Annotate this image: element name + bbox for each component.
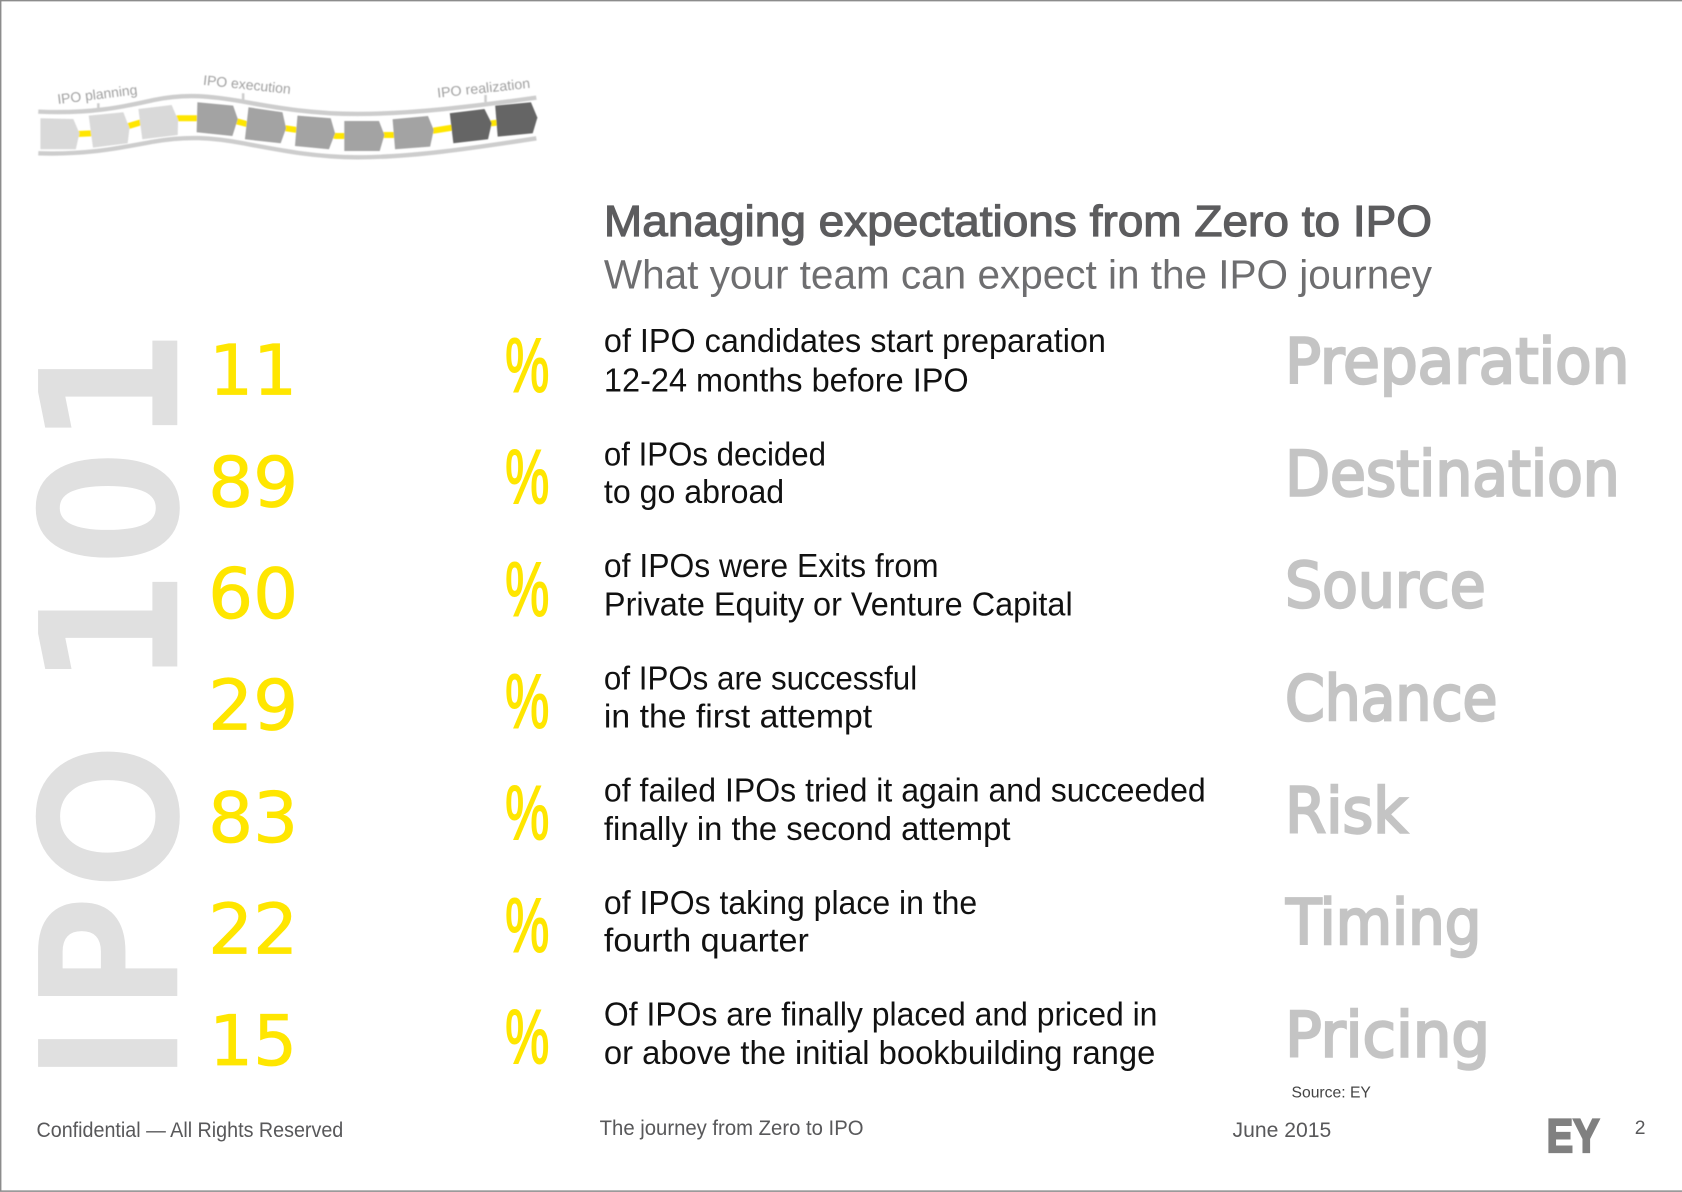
row 4: chance: in the first attempt: [604, 697, 873, 735]
row 7: pricing: or above the initial bookbuilding range: [604, 1034, 1155, 1072]
row 3: source: of IPOs were Exits from: [604, 547, 939, 585]
row 1: preparation: Preparation: [1285, 325, 1629, 398]
row 6: timing: [208, 883, 1481, 971]
row 1: preparation: of IPO candidates start preparation: [604, 322, 1106, 360]
row 3: source: 60: [208, 554, 298, 635]
row 2: destination: 89: [208, 442, 298, 523]
row 3: source: %: [505, 548, 549, 633]
footer: document title: The journey from Zero to IPO: [600, 1116, 864, 1140]
row 5: risk: 83: [208, 778, 298, 859]
row 5: risk: %: [505, 771, 549, 856]
row 7: pricing: %: [505, 995, 549, 1080]
yellow connector line: [77, 118, 498, 136]
source note: Source: EY: [1292, 1083, 1371, 1101]
row 4: chance: of IPOs are successful: [604, 660, 917, 698]
title: Managing expectations from Zero to IPO: [604, 197, 1432, 246]
row 5: risk: [208, 771, 1407, 859]
row 3: source: Source: [1285, 549, 1486, 622]
row 6: timing: of IPOs taking place in the: [604, 884, 977, 922]
row 3: source: [208, 547, 1486, 635]
row 5: risk: finally in the second attempt: [604, 810, 1011, 848]
row 1: preparation: 12-24 months before IPO: [604, 362, 969, 400]
vertical watermark: IPO 101: IPO 101: [8, 329, 214, 1079]
execution milestones: [197, 102, 434, 151]
subtitle: What your team can expect in the IPO journey: [604, 252, 1433, 298]
row 4: chance: Chance: [1285, 662, 1497, 735]
row 2: destination: %: [505, 435, 549, 520]
EY logo: EY: [1547, 1110, 1599, 1163]
IPO journey road graphic: [38, 72, 537, 157]
road labels: IPO execution: [202, 72, 292, 97]
road labels: [56, 72, 531, 107]
row 6: timing: %: [505, 883, 549, 968]
row 1: preparation: 11: [209, 331, 297, 412]
row 2: destination: Destination: [1285, 438, 1620, 511]
row 4: chance: [208, 659, 1497, 746]
row 5: risk: of failed IPOs tried it again and succeeded: [604, 771, 1206, 809]
row 7: pricing: Pricing: [1285, 999, 1490, 1072]
realization milestones: [450, 102, 537, 143]
row 6: timing: 22: [208, 890, 298, 971]
footer: date: June 2015: [1233, 1118, 1331, 1142]
row 1: preparation: %: [505, 324, 549, 409]
row 2: destination: of IPOs decided: [604, 436, 826, 474]
row 3: source: Private Equity or Venture Capital: [604, 586, 1073, 624]
road rails: [38, 93, 536, 157]
row 2: destination: to go abroad: [604, 473, 784, 511]
row 5: risk: Risk: [1285, 774, 1407, 847]
row 4: chance: 29: [208, 665, 298, 746]
row 7: pricing: [209, 995, 1490, 1082]
road labels: IPO realization: [436, 75, 531, 101]
road labels: IPO planning: [56, 81, 138, 107]
footer: confidentiality: Confidential — All Rights Reserved: [37, 1118, 343, 1142]
row 6: timing: Timing: [1285, 886, 1481, 959]
page number: 2: [1635, 1118, 1646, 1139]
row 7: pricing: 15: [209, 1001, 297, 1082]
row 7: pricing: Of IPOs are finally placed and priced in: [604, 995, 1157, 1033]
row 1: preparation: [209, 322, 1629, 412]
row 2: destination: [208, 435, 1620, 523]
row 6: timing: fourth quarter: [604, 921, 809, 959]
planning milestones: [40, 105, 178, 149]
row 4: chance: %: [505, 659, 549, 744]
